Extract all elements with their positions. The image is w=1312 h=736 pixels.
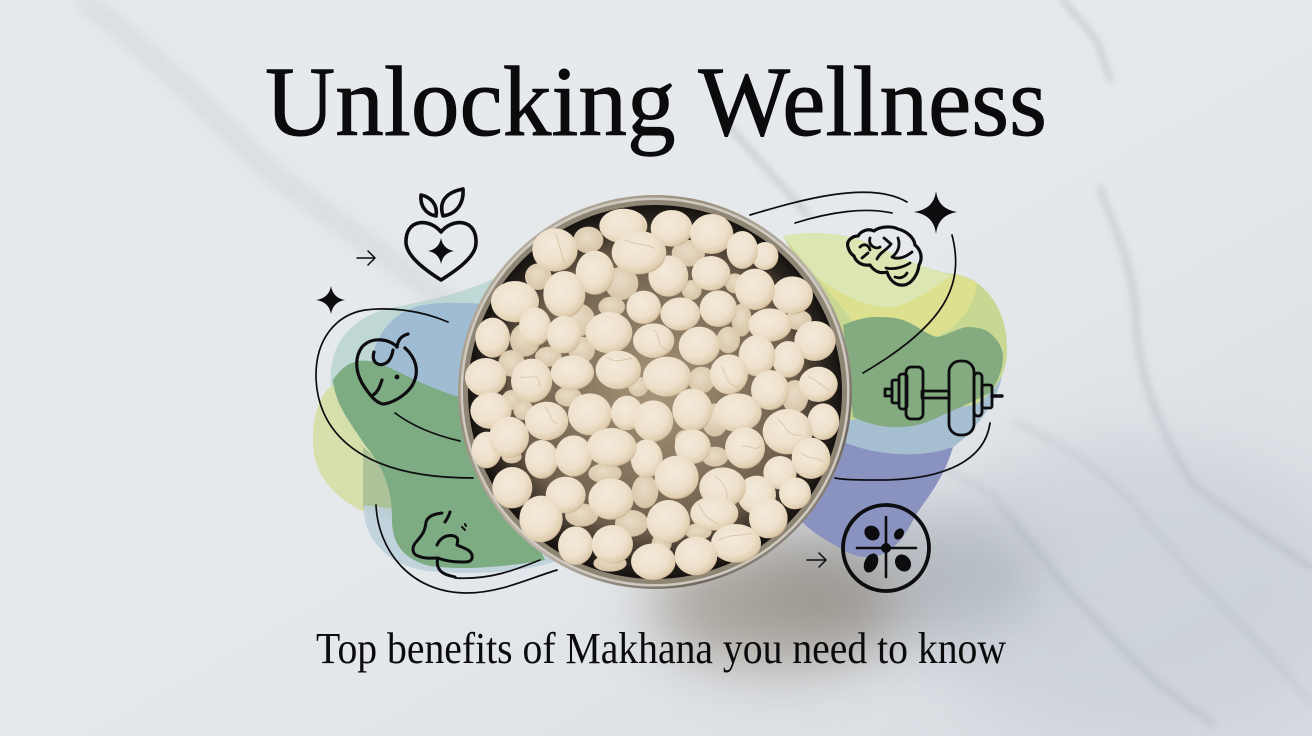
bowl interior [468, 205, 842, 579]
icon: dumbbell [885, 361, 1002, 435]
blob: violet [802, 440, 953, 557]
blob: lime [783, 233, 1007, 420]
blob: pale teal [331, 276, 500, 470]
icon: sparkle right [914, 191, 957, 234]
right colour blobs [783, 233, 1007, 557]
blob: pale yellow band [783, 233, 953, 307]
icon: small arrow right [807, 553, 826, 567]
blob: pale blue [845, 372, 1002, 454]
blob: pale blue bottom [364, 505, 560, 573]
title: Unlocking Wellness [265, 46, 1047, 157]
icon: seed circle [843, 505, 929, 591]
right flowing lines [750, 192, 990, 480]
icon: heart with leaves [406, 189, 476, 280]
icon: sparkle left [316, 286, 345, 314]
blob: blue [371, 303, 485, 420]
bowl of makhana [458, 195, 852, 589]
bowl cast shadow [650, 510, 1040, 667]
left colour blobs [313, 276, 560, 573]
blob: yellow green [313, 385, 395, 520]
icon: digestive organ [357, 334, 416, 404]
blob: green [843, 317, 1003, 427]
left flowing lines [316, 309, 557, 593]
icon: gut [413, 512, 472, 577]
subtitle: Top benefits of Makhana you need to know [316, 624, 1006, 673]
blob: green [333, 361, 545, 568]
makhana seeds, back layer [498, 227, 812, 572]
makhana seeds, front layer [465, 209, 839, 580]
icon: small arrow left [357, 251, 375, 265]
icon: brain [848, 227, 921, 285]
blob: yellow band [817, 275, 977, 337]
metal rim [458, 195, 852, 589]
blob: sage overlap [363, 447, 393, 520]
